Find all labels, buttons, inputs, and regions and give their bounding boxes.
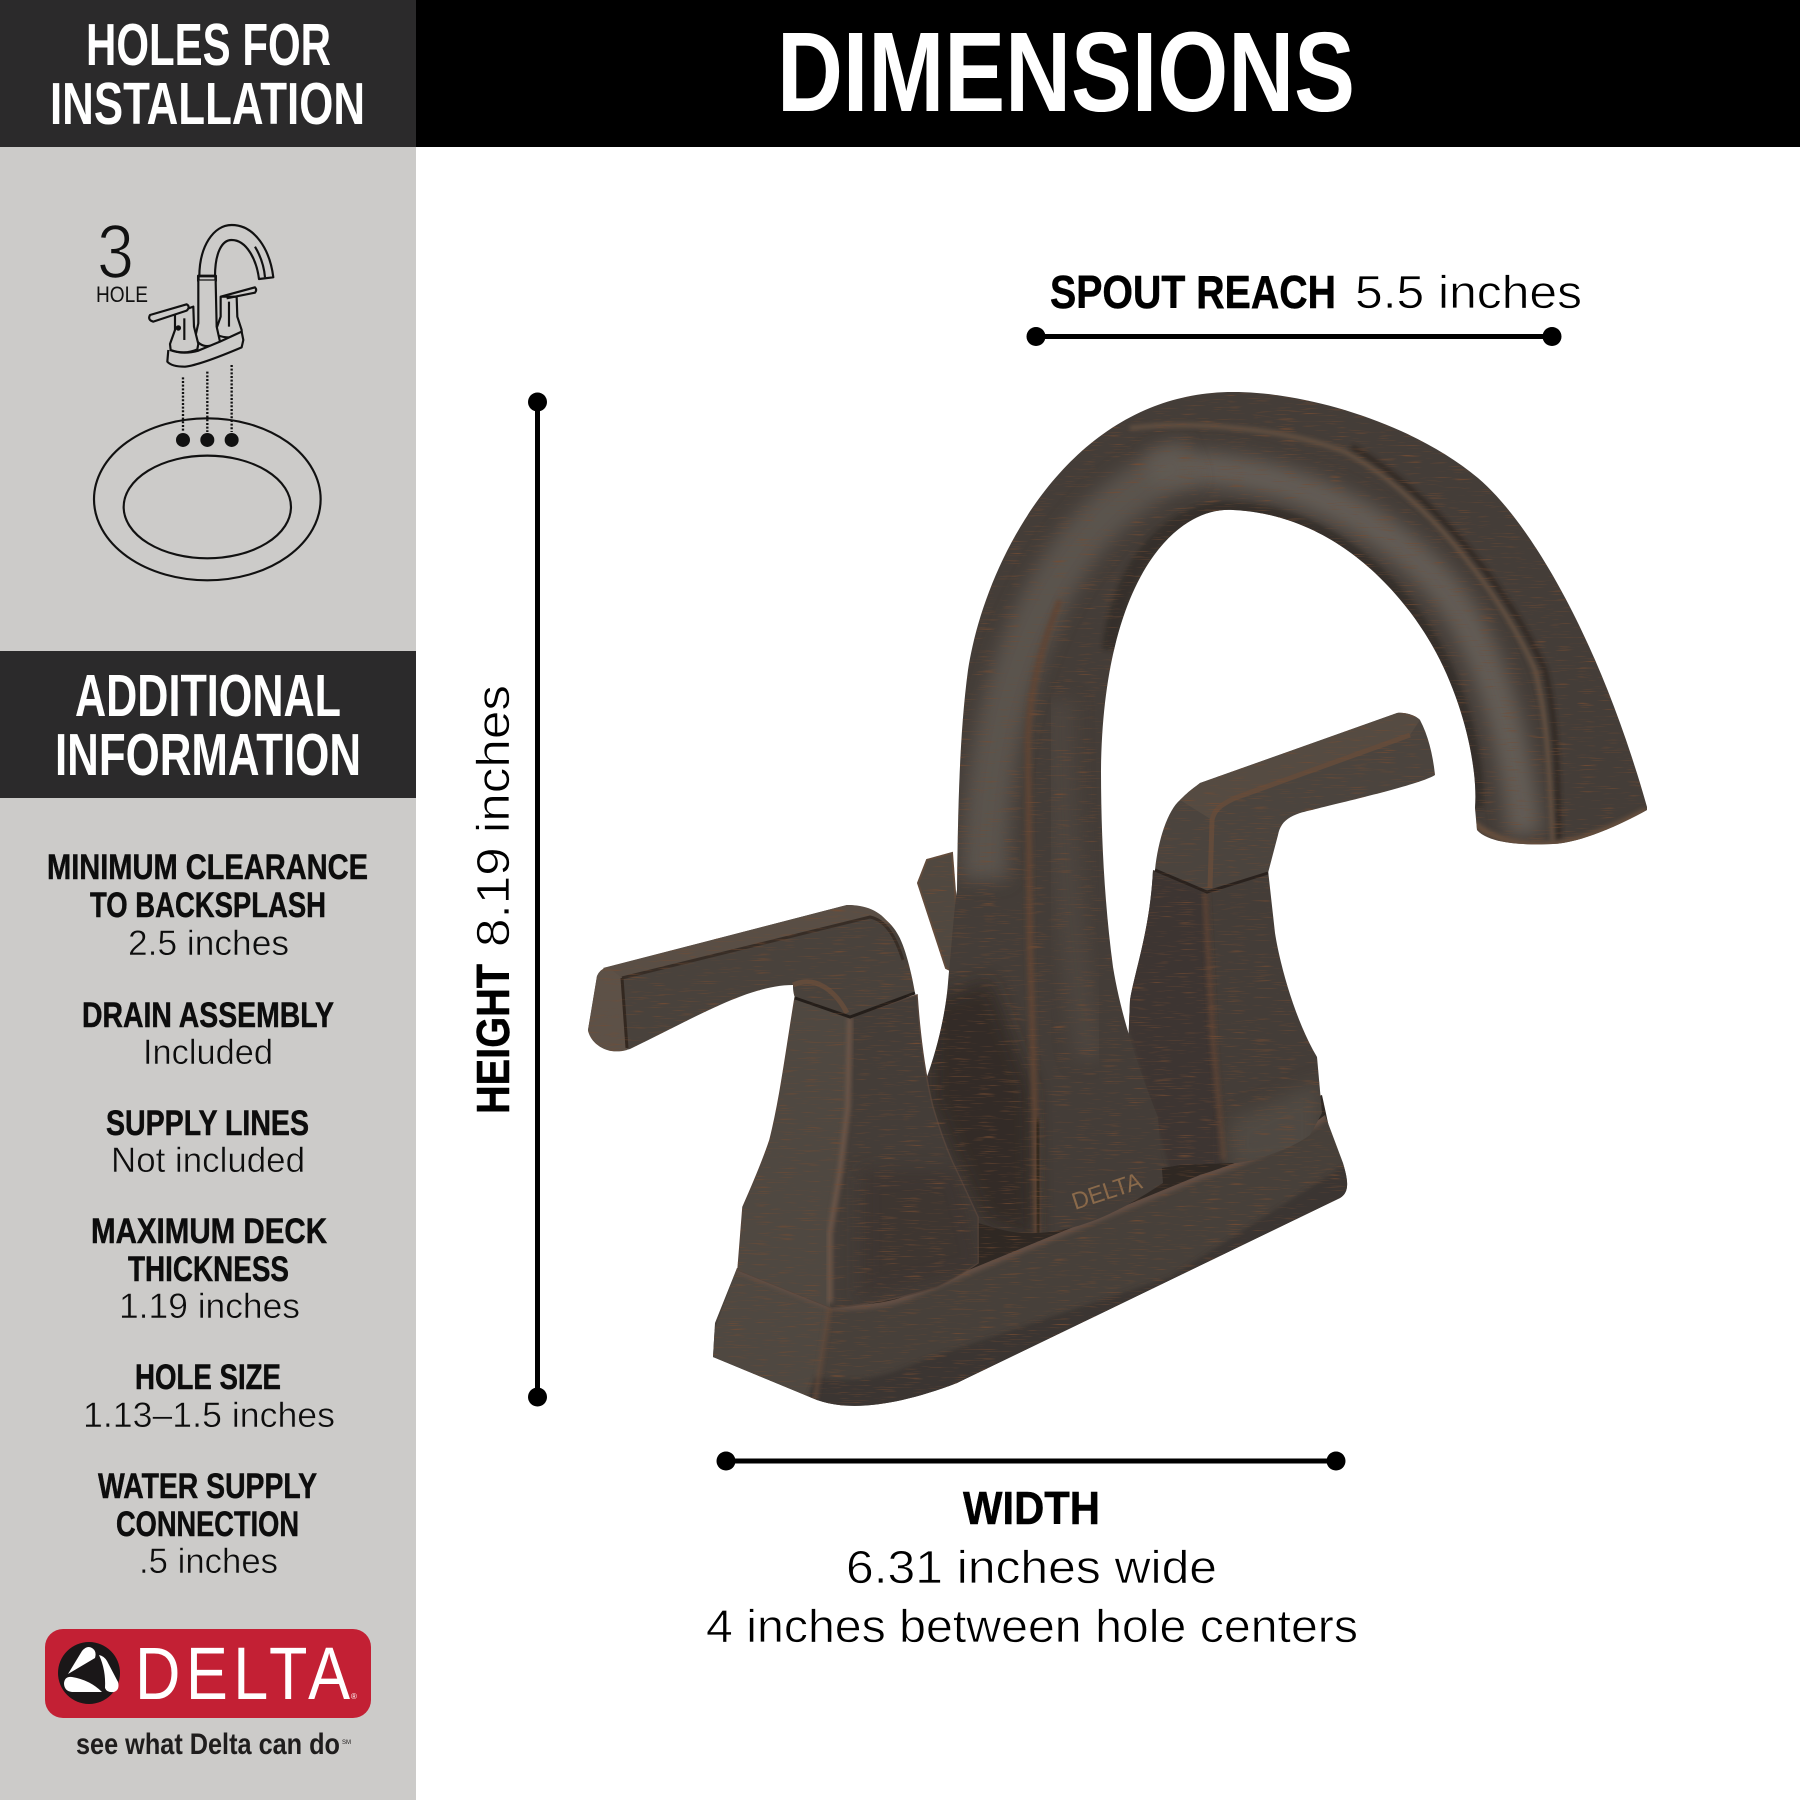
- text block: minimum clearance: 2.5 inches: [128, 924, 289, 963]
- dimension: height: HEIGHT: [467, 964, 519, 1114]
- text block: water supply connection: CONNECTION: [116, 1505, 299, 1544]
- text block: hole size: HOLE SIZE: [135, 1358, 281, 1397]
- heading: holes for installation: INSTALLATION: [50, 71, 365, 137]
- icon: 3 hole faucet and sink diagram: [94, 210, 321, 580]
- faucet: drain lift rod: [918, 853, 956, 970]
- text block: maximum deck thickness: 1.19 inches: [119, 1287, 300, 1326]
- logo: Delta: see what Delta can do: [76, 1728, 340, 1761]
- logo: Delta: ®: [351, 1692, 357, 1701]
- dimension: width: [706, 1452, 1358, 1652]
- text block: maximum deck thickness: MAXIMUM DECK: [91, 1212, 327, 1251]
- text block: minimum clearance: TO BACKSPLASH: [90, 886, 326, 925]
- dimension: spout reach: 5.5 inches: [1355, 266, 1582, 318]
- dimension: width: 4 inches between hole centers: [706, 1600, 1358, 1652]
- heading: additional information: INFORMATION: [55, 722, 361, 788]
- text block: drain assembly: Included: [143, 1033, 273, 1072]
- text block: hole size: 1.13–1.5 inches: [83, 1396, 335, 1435]
- product: bronze faucet: [588, 392, 1647, 1420]
- faucet: left handle base: [730, 990, 985, 1310]
- heading: holes for installation: HOLES FOR: [86, 12, 331, 78]
- text block: supply lines: Not included: [111, 1141, 305, 1180]
- faucet: right handle base: [1120, 870, 1322, 1170]
- text block: minimum clearance: MINIMUM CLEARANCE: [47, 848, 368, 887]
- text block: drain assembly: DRAIN ASSEMBLY: [82, 996, 334, 1035]
- heading: holes for installation: [0, 0, 416, 147]
- dimension: spout reach: [1026, 266, 1582, 346]
- text block: water supply connection: .5 inches: [139, 1542, 278, 1581]
- title banner: DIMENSIONS: DIMENSIONS: [777, 9, 1355, 135]
- heading: additional information: [0, 651, 416, 798]
- text block: water supply connection: [98, 1467, 317, 1581]
- logo: Delta: DELTA: [135, 1632, 350, 1715]
- text block: water supply connection: WATER SUPPLY: [98, 1467, 317, 1506]
- text block: minimum clearance: [47, 848, 368, 963]
- text: DELTA engraving on faucet: DELTA: [1069, 1168, 1145, 1216]
- text block: supply lines: [106, 1104, 309, 1180]
- logo: Delta: SM: [342, 1740, 351, 1746]
- text block: maximum deck thickness: [91, 1212, 327, 1326]
- text block: hole size: [83, 1358, 335, 1435]
- dimension: height: [467, 392, 547, 1406]
- icon: 3 hole faucet and sink diagram: HOLE: [96, 282, 148, 307]
- panel: left sidebar background: [0, 0, 416, 1800]
- icon: 3 hole faucet and sink diagram: 3: [97, 210, 134, 295]
- text block: drain assembly: [82, 996, 334, 1072]
- dimension: width: WIDTH: [963, 1482, 1100, 1534]
- heading: additional information: ADDITIONAL: [75, 663, 341, 729]
- dimension: width: 6.31 inches wide: [846, 1541, 1217, 1593]
- text block: supply lines: SUPPLY LINES: [106, 1104, 309, 1143]
- dimension: height: 8.19 inches: [467, 685, 519, 947]
- faucet: deck plate: [700, 1095, 1360, 1420]
- faucet: left lever: [588, 905, 915, 1051]
- faucet: spout and body: [900, 392, 1647, 1240]
- faucet: right lever: [1155, 713, 1435, 892]
- text block: maximum deck thickness: THICKNESS: [128, 1250, 289, 1289]
- logo: Delta: [45, 1629, 371, 1761]
- dimension: spout reach: SPOUT REACH: [1050, 266, 1336, 318]
- title banner: DIMENSIONS: [416, 0, 1800, 147]
